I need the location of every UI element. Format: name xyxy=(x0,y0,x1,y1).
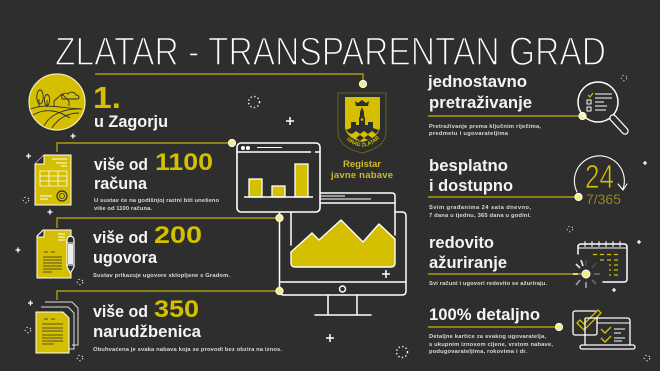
heading: Registar javne nabave xyxy=(330,159,393,181)
feature: free and available: 7 dana u tjednu, 365 dana u godini. xyxy=(429,213,531,219)
icon: checklist on screens xyxy=(573,310,635,349)
feature: 100% detailed: Detaljne kartice za svakog ugovaratelja, xyxy=(429,334,546,340)
heading: Registar javne nabave: Registar xyxy=(343,159,381,170)
feature: free and available: i dostupno xyxy=(429,176,513,195)
icon: contract with pen xyxy=(37,230,74,278)
feature: simple search: pretraživanje xyxy=(429,93,532,112)
decorative sparkles xyxy=(16,75,650,361)
icon: stack of order documents xyxy=(36,302,78,353)
feature: regular updates: Svi računi i ugovori redovito se ažuriraju. xyxy=(429,281,547,287)
stat: invoices: računa xyxy=(94,174,148,193)
stat: purchase orders: više od xyxy=(93,302,148,321)
stat: invoices: U sustav će na godišnjoj razini biti unešeno xyxy=(94,198,219,204)
connector nodes xyxy=(228,80,586,331)
stat: purchase orders: 350 xyxy=(154,296,199,323)
stat: purchase orders xyxy=(93,296,282,353)
icon: landscape circle xyxy=(29,74,85,130)
stat: purchase orders: Obuhvaćena je svaka nabava koja se provodi bez obzira na iznos. xyxy=(93,347,282,353)
icon: invoice document xyxy=(35,155,71,205)
stat: purchase orders: narudžbenica xyxy=(93,322,202,341)
stat: contracts: više od xyxy=(93,228,148,247)
stat: contracts: Sustav prikazuje ugovore sklopljene s Gradom. xyxy=(93,273,230,279)
icon: 24/7/365 clock xyxy=(574,156,627,207)
feature: 100% detailed xyxy=(429,305,553,355)
stat: invoices xyxy=(94,149,219,212)
stat: invoices: više od xyxy=(94,155,148,174)
chart: mountain area xyxy=(291,220,395,267)
icon: browser window with bar chart xyxy=(237,143,320,212)
feature: 100% detailed: 100% detaljno xyxy=(429,305,540,324)
icon: 24/7/365 clock: 7/365 xyxy=(586,191,621,207)
feature: simple search: predmetu i ugovarateljima xyxy=(429,131,509,137)
feature: simple search: jednostavno xyxy=(427,72,527,91)
feature: regular updates xyxy=(429,233,547,287)
feature: regular updates: ažuriranje xyxy=(429,253,507,272)
feature: 100% detailed: podugovarateljima, rokovima i dr. xyxy=(429,349,527,355)
feature: simple search xyxy=(427,72,541,137)
feature: regular updates: redovito xyxy=(429,233,494,252)
emblem: Grad Zlatar coat of arms: GRAD ZLATAR xyxy=(347,136,380,146)
connector lines xyxy=(57,74,586,327)
feature: 100% detailed: s ukupnim iznosom cijene, vrstom nabave, xyxy=(429,342,553,348)
stat: contracts: ugovora xyxy=(93,248,158,267)
stat: contracts: 200 xyxy=(154,222,202,249)
icon: large monitor xyxy=(280,193,406,315)
stat: contracts xyxy=(93,222,230,279)
feature: free and available: besplatno xyxy=(429,156,508,175)
stat: invoices: više od 1100 računa. xyxy=(94,206,152,212)
icon: calendar with spinner xyxy=(573,241,627,288)
icon: magnifying glass xyxy=(578,82,625,131)
stat: rank 1: 1. xyxy=(93,80,121,115)
icon: 24/7/365 clock: 24 xyxy=(585,158,614,195)
heading: Registar javne nabave: javne nabave xyxy=(330,170,393,181)
stat label: u Zagorju: u Zagorju xyxy=(94,112,168,131)
feature: free and available: Svim građanima 24 sata dnevno, xyxy=(429,205,531,211)
feature: free and available xyxy=(429,156,531,219)
emblem: Grad Zlatar coat of arms xyxy=(338,92,386,154)
stat: invoices: 1100 xyxy=(155,149,213,176)
feature: simple search: Pretraživanje prema ključnim riječima, xyxy=(429,124,541,130)
